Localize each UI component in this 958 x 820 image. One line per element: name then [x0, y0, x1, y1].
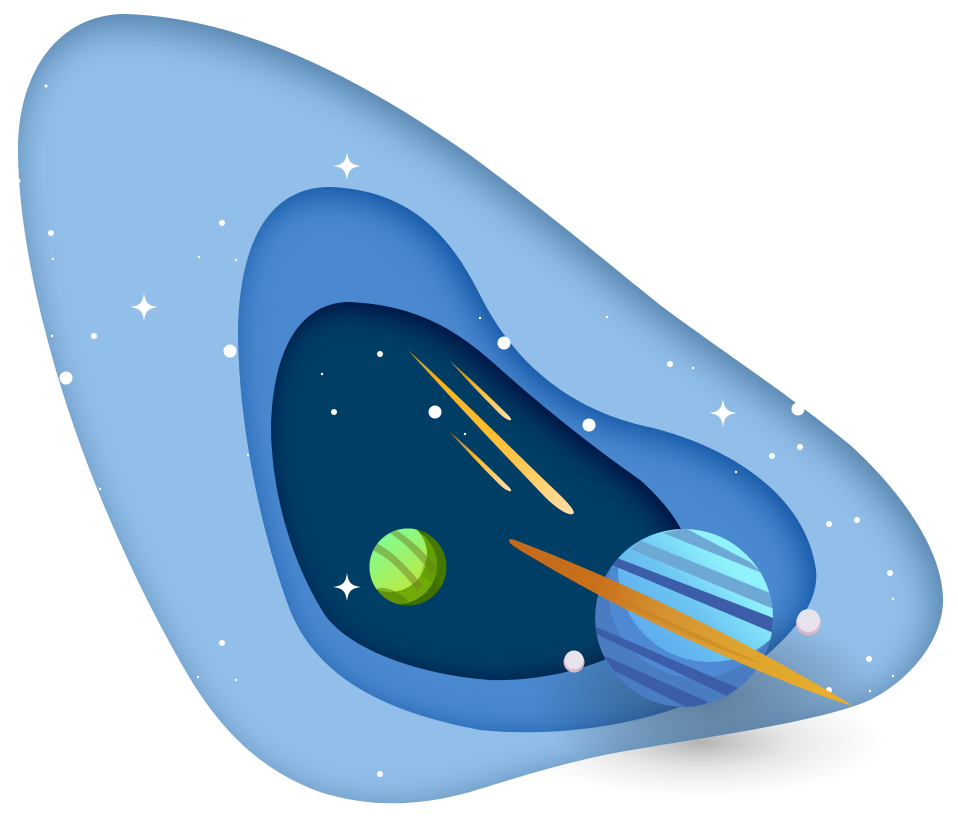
- small comet top: [449, 360, 511, 420]
- stars and dots: [16, 84, 894, 777]
- planet cast shadow on paper: [549, 624, 862, 756]
- moon left: [564, 650, 584, 672]
- green planet: [370, 528, 446, 606]
- small comet bottom: [449, 431, 511, 491]
- large comet: [408, 350, 574, 514]
- planet ring: [509, 539, 852, 705]
- moon right: [796, 609, 821, 636]
- inner deep space layer: [271, 302, 694, 680]
- middle paper layer: [238, 187, 816, 732]
- cast shadow beyond paper: [515, 686, 885, 798]
- blue striped planet: [595, 529, 773, 707]
